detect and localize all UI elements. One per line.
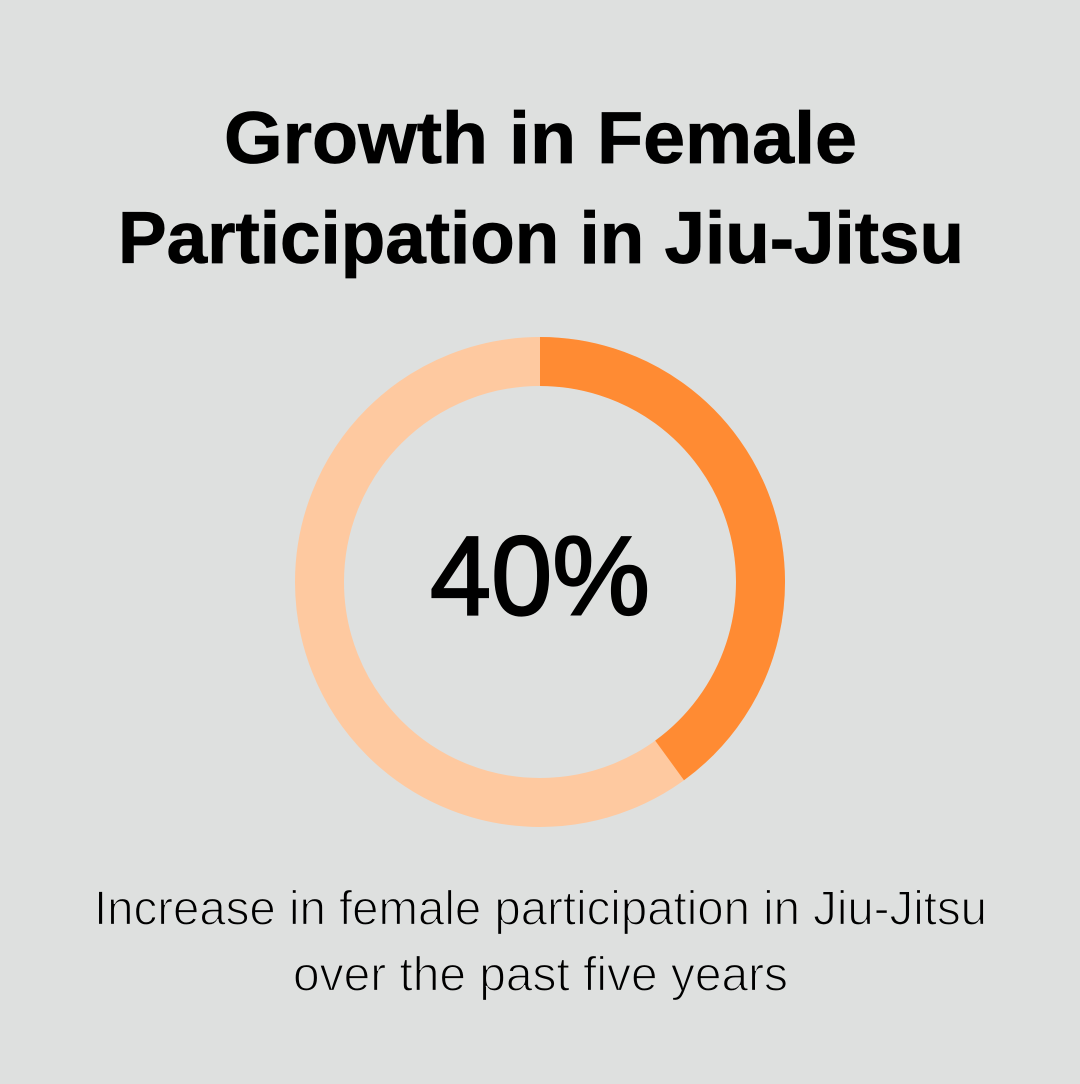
- center value: 40%: [430, 514, 650, 638]
- donut chart: 40%: [320, 362, 761, 802]
- caption: Increase in female participation in Jiu-Jitsu: [94, 882, 987, 936]
- donut value arc: [540, 362, 761, 760]
- title: Growth in Female: [224, 98, 857, 179]
- donut track: [320, 362, 760, 802]
- title: Participation in Jiu-Jitsu: [118, 198, 964, 279]
- title: [118, 98, 964, 279]
- caption: [94, 882, 987, 1002]
- caption: over the past five years: [293, 948, 788, 1002]
